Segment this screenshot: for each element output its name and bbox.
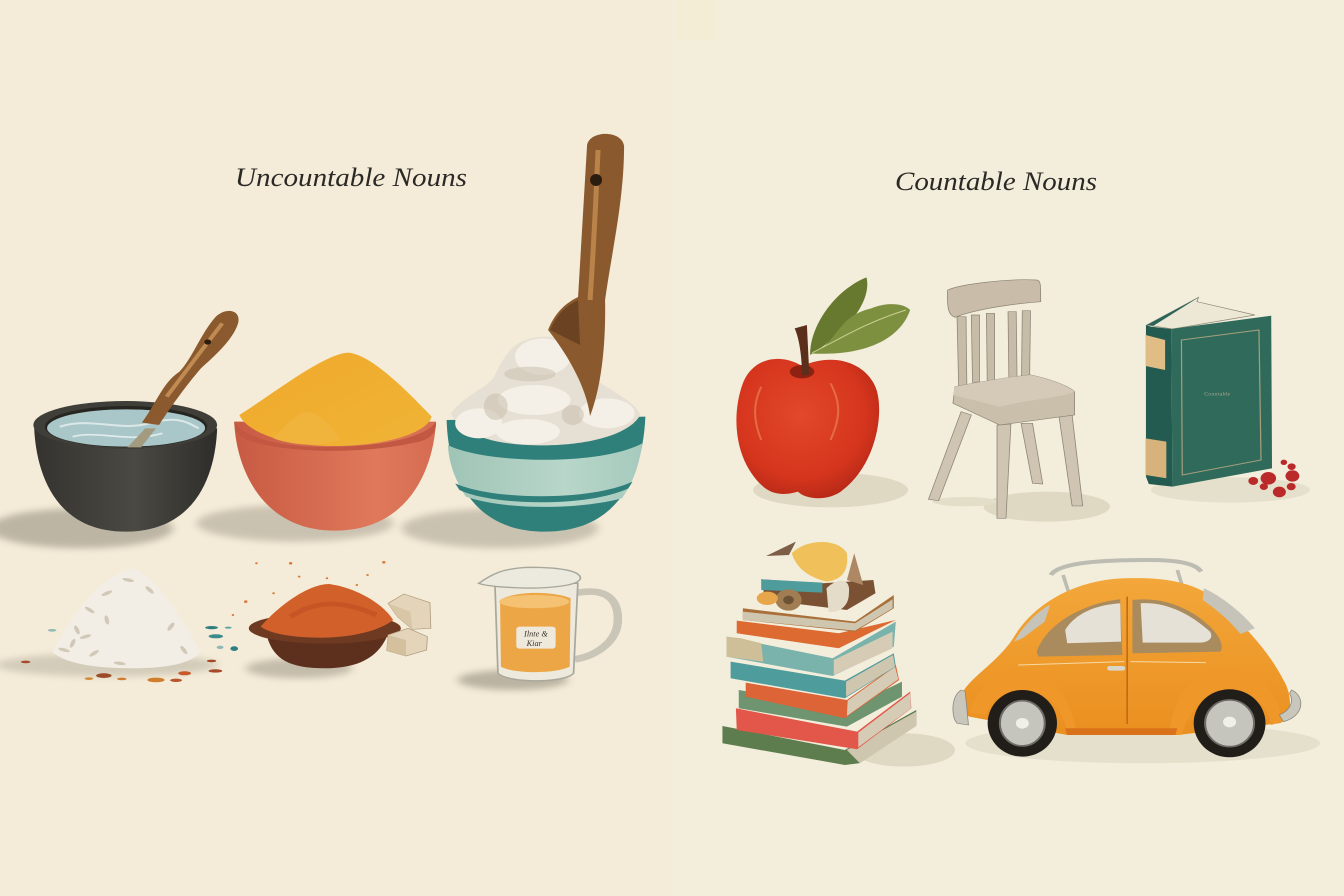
icon: spice bowl [232, 561, 401, 678]
icon: green book: Countable [1204, 392, 1231, 398]
icon: teal bowl with white heap [447, 337, 645, 532]
icon: rice pile [0, 568, 238, 682]
icon: small wooden spoon [142, 311, 239, 425]
icon: stack of books [722, 542, 955, 767]
icon: measuring jug: Kiar [526, 639, 543, 648]
panel: countable items [722, 277, 1320, 767]
icon: chair [928, 280, 1110, 522]
icon: red bowl with yellow meal [234, 353, 436, 531]
icon: apple [736, 277, 910, 507]
icon: green book [1146, 297, 1310, 503]
icon: measuring jug [457, 567, 618, 690]
icon: orange car [953, 560, 1320, 763]
icon: sugar cubes [387, 594, 431, 656]
title: uncountable nouns: Uncountable Nouns [235, 163, 467, 192]
title: countable nouns: Countable Nouns [895, 167, 1097, 196]
icon: measuring jug: Ilnte & [523, 630, 548, 639]
panel: uncountable items [0, 134, 645, 690]
icon: large wooden spoon [548, 134, 624, 416]
bowl shadows [0, 505, 598, 548]
icon: dark bowl with water [33, 401, 217, 532]
